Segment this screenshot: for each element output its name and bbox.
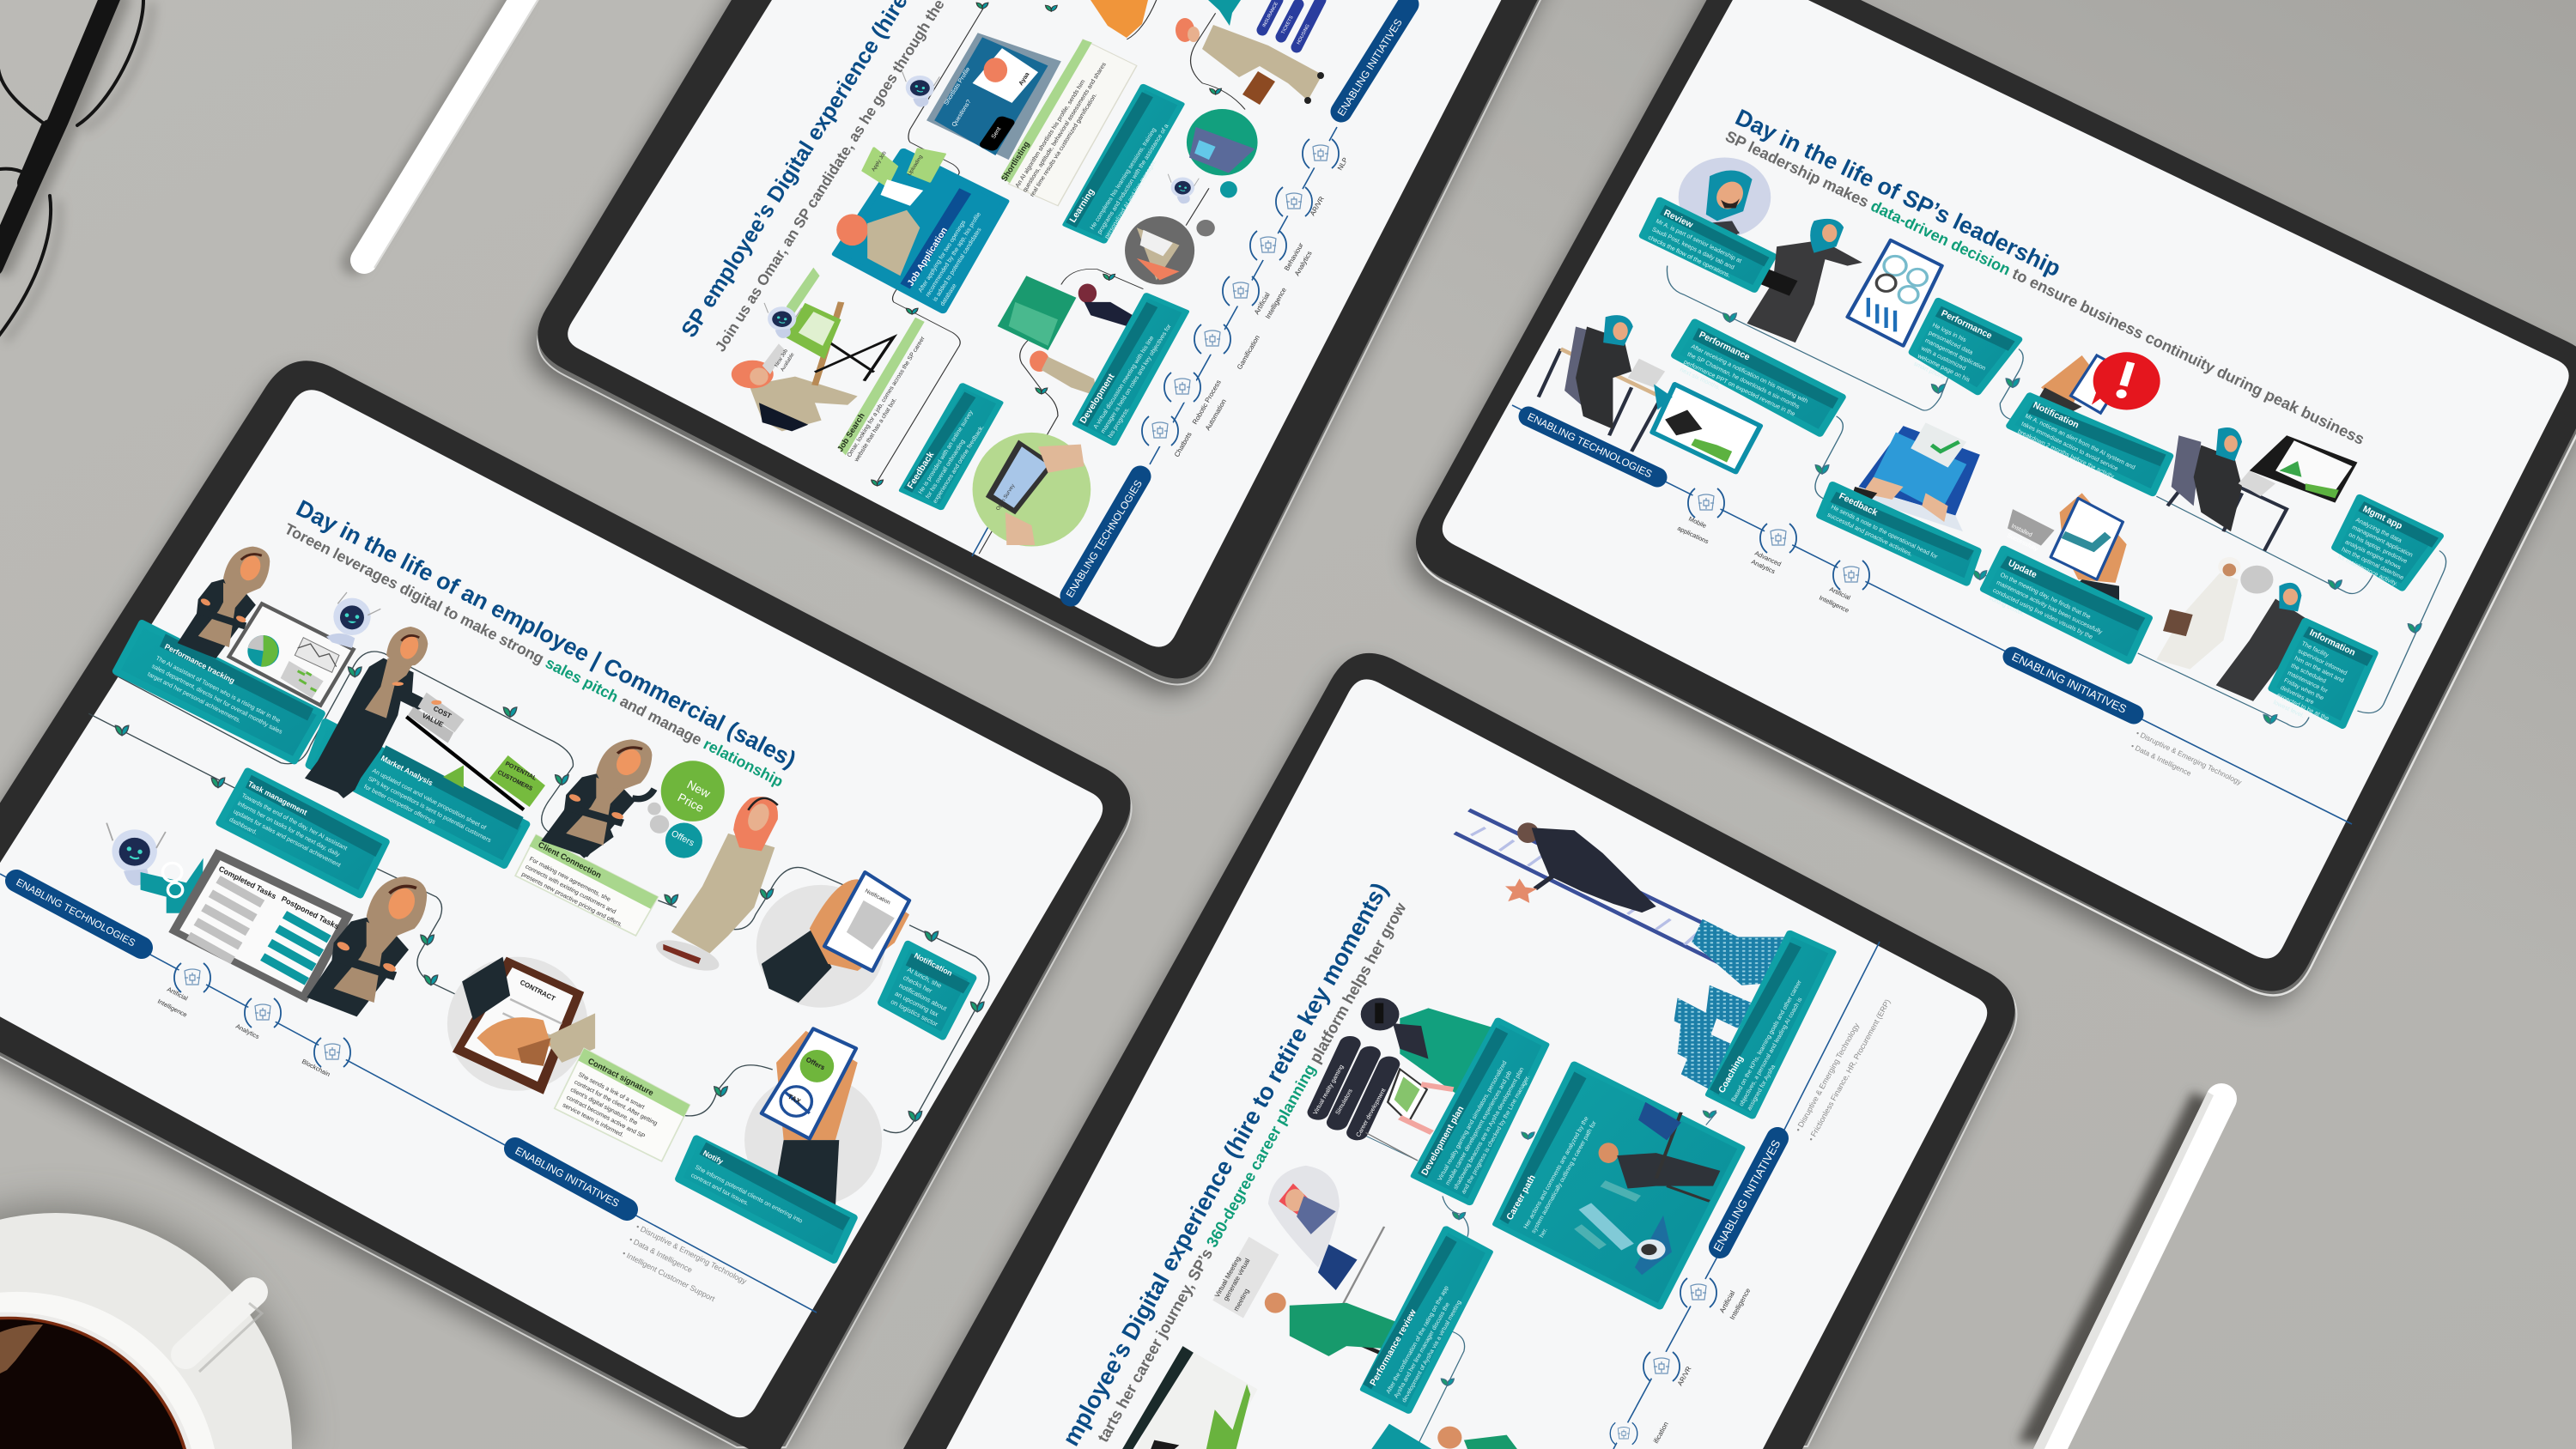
figure: man at desk <box>1539 315 1760 472</box>
pills: vr options: Simulators <box>1335 1088 1354 1116</box>
pills: vr options <box>1313 1044 1418 1161</box>
panel: learning: Learning <box>1067 187 1097 225</box>
figure: Omar at desk with robot: New Job <box>775 349 789 368</box>
panel: performance tracking: Performance tracking <box>163 642 236 685</box>
technology icons <box>156 962 350 1078</box>
panel: career path <box>1496 1064 1741 1307</box>
panel: mgmt app: for maintenance activity. <box>2337 553 2399 587</box>
figure: VR woman with tablet <box>1361 998 1496 1132</box>
panel: feedback: Feedback <box>1838 491 1880 518</box>
panel: development plan: shadowing beacons are in Aysha development plan <box>1452 1066 1525 1191</box>
panel: job application: Uploading <box>908 155 924 177</box>
figure: woman, offers and client: New <box>685 777 714 801</box>
panel: notification: Notification <box>913 951 954 978</box>
panel: task management: dashboard. <box>228 816 258 836</box>
coffee <box>0 1319 183 1449</box>
screen <box>1443 0 2569 959</box>
figure: woman on ladder reaching star <box>1455 810 1774 983</box>
panel: performance notification: next six months. <box>1679 367 1722 391</box>
pill: enabling technologies: ENABLING TECHNOLOGIES <box>15 876 137 949</box>
panel: task management <box>220 772 386 894</box>
figure: man at desk with laptop <box>2167 427 2357 551</box>
panel: performance notification: the SP Chairman, he downloads a six-months <box>1686 351 1801 410</box>
panel: performance notification <box>1674 322 1842 433</box>
baseline <box>1613 942 1880 1449</box>
pill: enabling technologies: ENABLING TECHNOLOGIES <box>1526 410 1654 480</box>
figure: woman, offers and client: Offers <box>670 828 696 849</box>
panel: performance tracking: sales department, directs her for overall monthly sales <box>150 663 283 736</box>
panel: contract signature: Contract signature <box>586 1057 655 1098</box>
panel: contract signature: contract for the client. After getting <box>574 1079 659 1127</box>
screen <box>946 679 1987 1449</box>
initiatives list: • Frictionless Finance, HR, Procurement (ERP) <box>1807 997 1893 1143</box>
technology icons: Intelligence <box>1728 1287 1753 1321</box>
panel: contract signature: client's digital signature, the <box>569 1086 639 1126</box>
shadow <box>905 665 2008 1446</box>
cup handle <box>185 1292 253 1355</box>
panel: job application <box>835 148 1005 311</box>
initiatives list: • Disruptive & Emerging Technology <box>635 1222 749 1286</box>
panel: performance review: Performance review <box>1368 1307 1419 1387</box>
figure: bottom panel and woman <box>1371 1424 1517 1449</box>
panel: feedback: Feedback <box>905 450 936 491</box>
figure: offers phone: TAX <box>787 1093 802 1106</box>
panel: performance review: After the confirmation of the rating on the app <box>1385 1285 1450 1395</box>
panel: performance notification: performance PPT on expected revenue in the <box>1682 359 1796 418</box>
panel: job application: database <box>939 282 958 307</box>
connectors <box>1364 1111 1716 1446</box>
panel: review: Review <box>1662 208 1695 231</box>
panel: feedback <box>1820 485 1978 583</box>
panel: performance review: development of Aysha via a virtual meeting <box>1400 1299 1462 1404</box>
panel: learning: personalized AI and line manager. <box>1103 159 1157 240</box>
figure: woman, offers and client <box>541 739 778 977</box>
initiatives list: • Data & Intelligence <box>628 1235 694 1275</box>
technology icons: Mobile <box>1687 515 1708 530</box>
subtitle: Toreen leverages digital to make strong sales pitch and manage relationship <box>282 520 786 791</box>
panel: performance tracking: The AI assistant of Toreen who is a rising star in the <box>155 655 282 724</box>
figure: learning circles <box>1125 109 1258 285</box>
figure: city towers <box>1674 919 1788 1089</box>
panel: shortlisting: questions, aptitude, behavioral assessments and shares <box>1021 61 1108 193</box>
panel: mgmt app: Mgmt app <box>2361 504 2404 531</box>
panel: feedback: He sends a note to the operational head for <box>1830 504 1939 561</box>
figure: contract and handshake <box>447 957 595 1094</box>
technology icons: Intelligence <box>1264 286 1288 320</box>
initiatives list: • Disruptive & Emerging Technology <box>2135 729 2244 787</box>
panel: job application: recommended by the app, his profile <box>924 211 982 298</box>
panel: market analysis: for better competitor offerings <box>362 783 437 826</box>
panel: shortlisting: An AI algorithm shortlists his profile, sends him <box>1014 78 1086 189</box>
tablet: employee digital experience (bottom centre) <box>903 653 2016 1449</box>
panel: notification: takes immediate action to avoid service <box>2020 421 2119 472</box>
panel: task management: informs her on tasks for the next day, daily <box>236 800 341 858</box>
screen <box>0 390 1103 1417</box>
panel: job search <box>835 318 934 464</box>
figure: robot and task dashboard: Postponed Tasks <box>280 894 340 931</box>
figure: top man, orange panel, bubble <box>1091 0 1324 105</box>
panel: update: sorting center. <box>1988 595 2026 617</box>
metal rim <box>1418 0 2576 995</box>
panel: development plan <box>1414 1021 1546 1203</box>
figure: shortlist laptop and robot: Questions? <box>951 99 973 128</box>
panel: performance logs: management application <box>1923 337 1987 372</box>
panel: feedback: for his overall onboarding <box>924 439 966 500</box>
bezel <box>538 0 1589 678</box>
figure: woman with dashboard <box>178 547 380 706</box>
panel: learning: programs and induction with the assistance of a <box>1096 123 1170 235</box>
panel: performance logs: welcome page on his <box>1916 352 1971 384</box>
cup rim <box>0 1292 215 1449</box>
panel: notification: breakdown 2 months before the activity. <box>2016 428 2117 481</box>
panel: coaching: assigned for Aysha <box>1746 1064 1777 1112</box>
technology icons: Robotic Process <box>1191 379 1223 426</box>
panel: shortlisting: real time results via customized gamification. <box>1029 92 1098 198</box>
technology icons: Analytics <box>234 1022 261 1040</box>
panel: information: Friday when the <box>2283 676 2325 701</box>
panel: review: Saudi Post, keeps a daily tab and <box>1651 226 1735 271</box>
metal rim <box>909 658 2016 1446</box>
technology icons: Intelligence <box>1818 594 1850 615</box>
figure: tablet in hands <box>973 433 1091 546</box>
technology icons <box>1610 1277 1753 1446</box>
initiatives list: • Data & Intelligence <box>2129 742 2193 778</box>
figure: shortlist laptop and robot <box>902 33 1061 160</box>
pill: enabling initiatives: ENABLING INITIATIVES <box>513 1144 621 1210</box>
screen <box>568 0 1523 647</box>
panel: notification: an upcoming tax <box>894 990 940 1018</box>
panel: job application: is added to potential candidates <box>932 226 983 303</box>
panel: contract signature: contract becomes active and SP <box>565 1094 647 1140</box>
panel: information: him on the alert and <box>2293 655 2345 684</box>
panel: update <box>1984 549 2149 661</box>
figure: tablet in hands: Open Survey <box>996 483 1016 512</box>
panel: client connection: For making new agreements, she <box>528 856 611 903</box>
figure: offers phone <box>744 1028 882 1207</box>
panel: notification: Mr A. notices an alert from the AI system and <box>2024 413 2136 471</box>
panel: contract signature: service team is informed. <box>562 1101 625 1138</box>
title: Day in the life of an employee | Commercial (sales) <box>292 495 800 773</box>
subtitle: tarts her career journey, SP’s 360-degree career planning platform helps her grow <box>1094 899 1410 1446</box>
initiatives list: • Intelligent Customer Support <box>621 1249 717 1303</box>
panel: performance logs <box>1912 301 2019 395</box>
technology icons: Artificial <box>166 985 190 1003</box>
panel: mgmt app: him the optimal date/time <box>2341 546 2405 581</box>
technology icons: Artificial <box>1253 291 1272 316</box>
panel: information: expected to be at the <box>2275 692 2330 722</box>
panel: feedback: successful and proactive activities. <box>1826 512 1913 558</box>
figure: alert on phone <box>2038 352 2160 416</box>
technology icons <box>1142 138 1350 458</box>
panel: notify: Notify <box>702 1149 725 1166</box>
panel: notification: notifications about <box>897 981 949 1013</box>
technology icons: Analytics <box>1293 250 1314 277</box>
technology icons: Behaviour <box>1283 241 1305 272</box>
panel: job search: Omar, looking for a job, comes across the SP career <box>846 335 927 458</box>
technology icons: Blockchain <box>301 1058 331 1078</box>
technology icons: NLP <box>1336 156 1350 172</box>
panel: review: Mr A. is part of senior leadership at <box>1655 218 1742 264</box>
pills: vr options: Virtual reality gaming <box>1313 1064 1345 1116</box>
technology icons: AR/VR <box>1676 1365 1693 1387</box>
panel: feedback <box>902 385 1000 508</box>
technology icons: Intelligence <box>156 997 188 1019</box>
figure: manager on video call <box>1212 1166 1400 1356</box>
panel: notify: contract and tax issues. <box>690 1172 750 1207</box>
stylus bottom right <box>2018 1083 2237 1449</box>
technology icons: Chatbots <box>1173 431 1194 458</box>
metal rim <box>0 366 1132 1447</box>
panel: review: checks the flow of the operations. <box>1647 234 1731 279</box>
panel: job application: Job Application <box>905 226 950 288</box>
technology icons: Advanced <box>1753 549 1783 568</box>
figure: development manager and dashboard <box>998 276 1140 397</box>
cup inner wall <box>0 1313 191 1449</box>
technology icons: ification <box>1652 1421 1670 1445</box>
panel: review <box>1643 200 1773 289</box>
panel: coaching: objectives, a personal and leading AI coach is <box>1738 996 1804 1107</box>
panel: performance logs: with a customized <box>1919 344 1967 372</box>
panel: task management: Towards the end of the day, her AI assistant <box>240 792 349 852</box>
bezel <box>0 361 1131 1449</box>
figure: shortlist laptop and robot: Sent <box>991 126 1002 140</box>
figure: offers phone: Offers <box>805 1056 827 1072</box>
panel: information: the scheduled <box>2290 662 2327 685</box>
figure: Omar at desk with robot: Available <box>781 352 796 373</box>
panel: notification: checks her <box>902 973 933 995</box>
panel: career path: Her actions and comments are analyzed by the <box>1522 1115 1590 1230</box>
panel: task management: Task management <box>246 779 308 817</box>
figure: manager on video call: generate virtual <box>1222 1257 1252 1302</box>
figure: woman with cost/value scale: COST <box>432 705 453 720</box>
pill: enabling initiatives: ENABLING INITIATIVES <box>1711 1137 1783 1253</box>
figure: phone notification <box>756 872 909 1008</box>
panel: mgmt app: management application <box>2351 524 2414 559</box>
metal rim <box>538 0 1589 684</box>
bezel <box>1416 0 2576 991</box>
figure: leader portrait <box>1679 158 1771 237</box>
figure: shortlist laptop and robot: Ayaa <box>1018 71 1030 87</box>
panel: notification <box>881 944 973 1036</box>
panel: shortlisting <box>999 39 1137 206</box>
panel: development plan: Development plan <box>1419 1105 1466 1177</box>
panel: information: supervisor informed <box>2297 647 2348 676</box>
panel: job search: website that has a chat bot. <box>853 397 898 464</box>
coffee edge <box>0 1317 186 1449</box>
panel: performance notification: Performance <box>1698 330 1752 363</box>
panel: information: maintenance for <box>2287 670 2330 694</box>
panel: learning <box>1066 86 1182 241</box>
technology icons: Analytics <box>1750 558 1777 575</box>
panel: client connection: connects with existing customers and <box>525 864 617 915</box>
figure: shortlist laptop and robot: Shortlists Profile <box>944 66 972 106</box>
panel: development <box>1076 295 1186 444</box>
panel: task management: updates for sales and personal achievement <box>232 808 342 869</box>
panel: performance review: Aysha and her line manager discuss the <box>1393 1301 1451 1399</box>
figure: top man, orange panel, bubble: HOUSING <box>1296 23 1311 45</box>
panel: notification <box>2010 396 2170 493</box>
panel: job search: Job Search <box>835 411 867 454</box>
panel: coaching: Coaching <box>1716 1054 1746 1094</box>
connectors <box>872 0 1245 554</box>
panel: mgmt app: analysis engine shows <box>2344 538 2403 571</box>
figure: woman with cost/value scale: POTENTIAL <box>504 761 538 782</box>
initiatives list: • Disruptive & Emerging Technology <box>1794 1022 1861 1133</box>
tablet: SP's leadership (right) <box>1409 0 2576 1004</box>
figure: Omar at desk with robot <box>732 270 894 431</box>
panel: market analysis: SP's key competitors is sent to potential customers <box>367 775 493 844</box>
panel: career path: Career path <box>1504 1173 1538 1222</box>
panel: information: deliveries are <box>2280 684 2315 706</box>
initiatives list <box>621 1222 749 1303</box>
technology icons: Automation <box>1204 397 1228 432</box>
shadow <box>1409 0 2576 1004</box>
panel: performance tracking: target and her personal achievements. <box>146 670 242 724</box>
panel: career path: system automatically outlining a career path for <box>1530 1119 1598 1234</box>
panel: mgmt app: on his laptop, predictive <box>2348 531 2409 565</box>
panel: job application: Apply Job <box>872 150 888 173</box>
panel: notify: She informs potential clients on entering into <box>694 1164 804 1225</box>
panel: information: Information <box>2308 627 2357 658</box>
technology icons: Artificial <box>1828 585 1852 602</box>
figure: laptop with mail <box>1851 422 1980 531</box>
coffee cup <box>0 1204 301 1449</box>
tablet: employee commercial (left) <box>0 361 1132 1449</box>
panel: job application: After applying for two openings <box>917 219 968 294</box>
panel: contract signature <box>555 1048 690 1161</box>
figure: manager on video call: Virtual Meeting <box>1213 1255 1242 1299</box>
panel: development: his progress. <box>1107 406 1131 440</box>
technology icons: Gamification <box>1236 334 1261 371</box>
technology icons: applications <box>1676 524 1710 545</box>
panel: development: manager is held on roles and key objectives for <box>1099 323 1173 434</box>
panel: mgmt app <box>2335 498 2440 589</box>
figure: robot and task dashboard: Completed Tasks <box>217 864 277 900</box>
panel: market analysis: Market Analysis <box>380 754 434 787</box>
technology icons: Artificial <box>1718 1289 1736 1314</box>
panel: update: On the meeting day, he finds that the <box>1999 572 2092 621</box>
title: mployee’s Digital experience (hire to retire key moments) <box>1057 878 1393 1449</box>
figure: man with phone dashboard <box>1747 219 1942 346</box>
pills: vr options: Career development <box>1356 1088 1388 1138</box>
figure: performance dashboard <box>1122 1346 1257 1449</box>
stylus top left <box>354 0 541 268</box>
panel: market analysis: An updated cost and value proposition sheet of <box>371 767 487 831</box>
panel: update: maintenance activity has been successfully <box>1996 579 2104 636</box>
panel: notification: Notification <box>2032 400 2081 431</box>
panel: mgmt app: Analyzing the data <box>2354 517 2403 544</box>
panel: development plan: and the progress is checked by the Line manager. <box>1460 1074 1531 1195</box>
panel: performance notification: After receiving a notification on his meeting with <box>1690 343 1809 405</box>
figure: top man, orange panel, bubble: TICKETS <box>1280 15 1295 35</box>
panel: update: Update <box>2007 558 2038 580</box>
figure: woman, offers and client: Price <box>676 790 707 815</box>
figure: manager on video call: meeting <box>1232 1288 1251 1313</box>
pill: enabling initiatives: ENABLING INITIATIVES <box>2010 650 2129 716</box>
panel: performance logs: Performance <box>1940 308 1994 342</box>
panel: development plan: Virtual reality gaming and simulators, personalized <box>1437 1060 1509 1182</box>
panel: information: lowest level. <box>2272 699 2306 719</box>
panel: notification: on logistics sector <box>890 997 939 1028</box>
panel: market analysis <box>309 722 526 865</box>
figure: woman with cost/value scale <box>305 627 545 809</box>
figure: installed phone: Installed <box>2010 524 2033 538</box>
panel: information: The facility <box>2300 640 2330 659</box>
baseline <box>0 874 817 1313</box>
shadow <box>0 374 1126 1447</box>
baseline <box>972 127 1337 556</box>
panel: development: Development <box>1078 372 1117 426</box>
crema <box>0 1325 43 1373</box>
panel: performance logs: personalized data <box>1928 330 1974 356</box>
tablet: SP employee hire to retire (top centre) <box>531 0 1589 692</box>
pill: enabling technologies: ENABLING TECHNOLOGIES <box>1064 478 1145 600</box>
panel: development: A virtual discussion meeting with his line <box>1092 335 1156 430</box>
bezel <box>903 653 2014 1449</box>
panel: performance review <box>1363 1228 1490 1411</box>
panel: feedback: experiences and online feedback. <box>932 424 986 505</box>
panel: update: conducted using live video visuals by the <box>1991 587 2094 640</box>
panel: notification: At lunch, she <box>906 966 943 990</box>
connectors <box>1667 266 2446 727</box>
figure: woman with cost/value scale: CUSTOMERS <box>496 770 533 792</box>
figure: robot and task dashboard <box>106 823 427 1016</box>
connectors <box>88 652 989 1133</box>
figure: installed phone <box>2006 493 2127 605</box>
panel: contract signature: She sends a link of a smart <box>577 1071 646 1111</box>
glasses <box>0 0 152 339</box>
panel: performance tracking <box>116 623 322 761</box>
technology icons <box>1676 488 1869 615</box>
figure: phone notification: Notification <box>864 888 891 906</box>
panel: career path: her. <box>1538 1227 1549 1239</box>
subtitle: SP leadership makes data-driven decision to ensure business continuity during peak business <box>1722 127 2367 448</box>
panel: coaching <box>1709 933 1832 1116</box>
figure: woman with cost/value scale: VALUE <box>421 712 445 729</box>
panel: performance logs: smart phone. <box>1913 361 1947 382</box>
saucer <box>0 1213 292 1449</box>
pill: enabling initiatives: ENABLING INITIATIVES <box>1335 16 1405 118</box>
figure: top man, orange panel, bubble: INSURANCE <box>1261 1 1279 28</box>
panel: client connection: Client Connection <box>537 840 603 881</box>
panel: information <box>2272 621 2374 730</box>
baseline <box>1512 405 2352 824</box>
figure: contract and handshake: CONTRACT <box>519 979 556 1003</box>
panel: feedback: He is provided with an online survey <box>917 409 975 495</box>
panel: learning: He completes his learning sessions, training <box>1089 126 1157 231</box>
panel: shortlisting: Shortlisting <box>999 140 1032 184</box>
panel: development plan: mobile career development experiences and job <box>1444 1070 1513 1186</box>
panel: client connection: presents new proactive pricing and offers. <box>520 870 623 929</box>
panel: client connection <box>515 835 658 936</box>
panel: notify <box>678 1139 854 1260</box>
panel: coaching: Based on the KPIs, learning goals and other career <box>1730 979 1803 1103</box>
figure: installed phone: Successfully <box>2006 533 2039 553</box>
technology icons: AR/VR <box>1309 195 1326 217</box>
shadow <box>531 0 1582 692</box>
figure: two men talking <box>2156 557 2306 701</box>
panel: performance logs: He logs in his <box>1931 322 1967 343</box>
title: Day in the life of SP’s leadership <box>1731 104 2065 282</box>
